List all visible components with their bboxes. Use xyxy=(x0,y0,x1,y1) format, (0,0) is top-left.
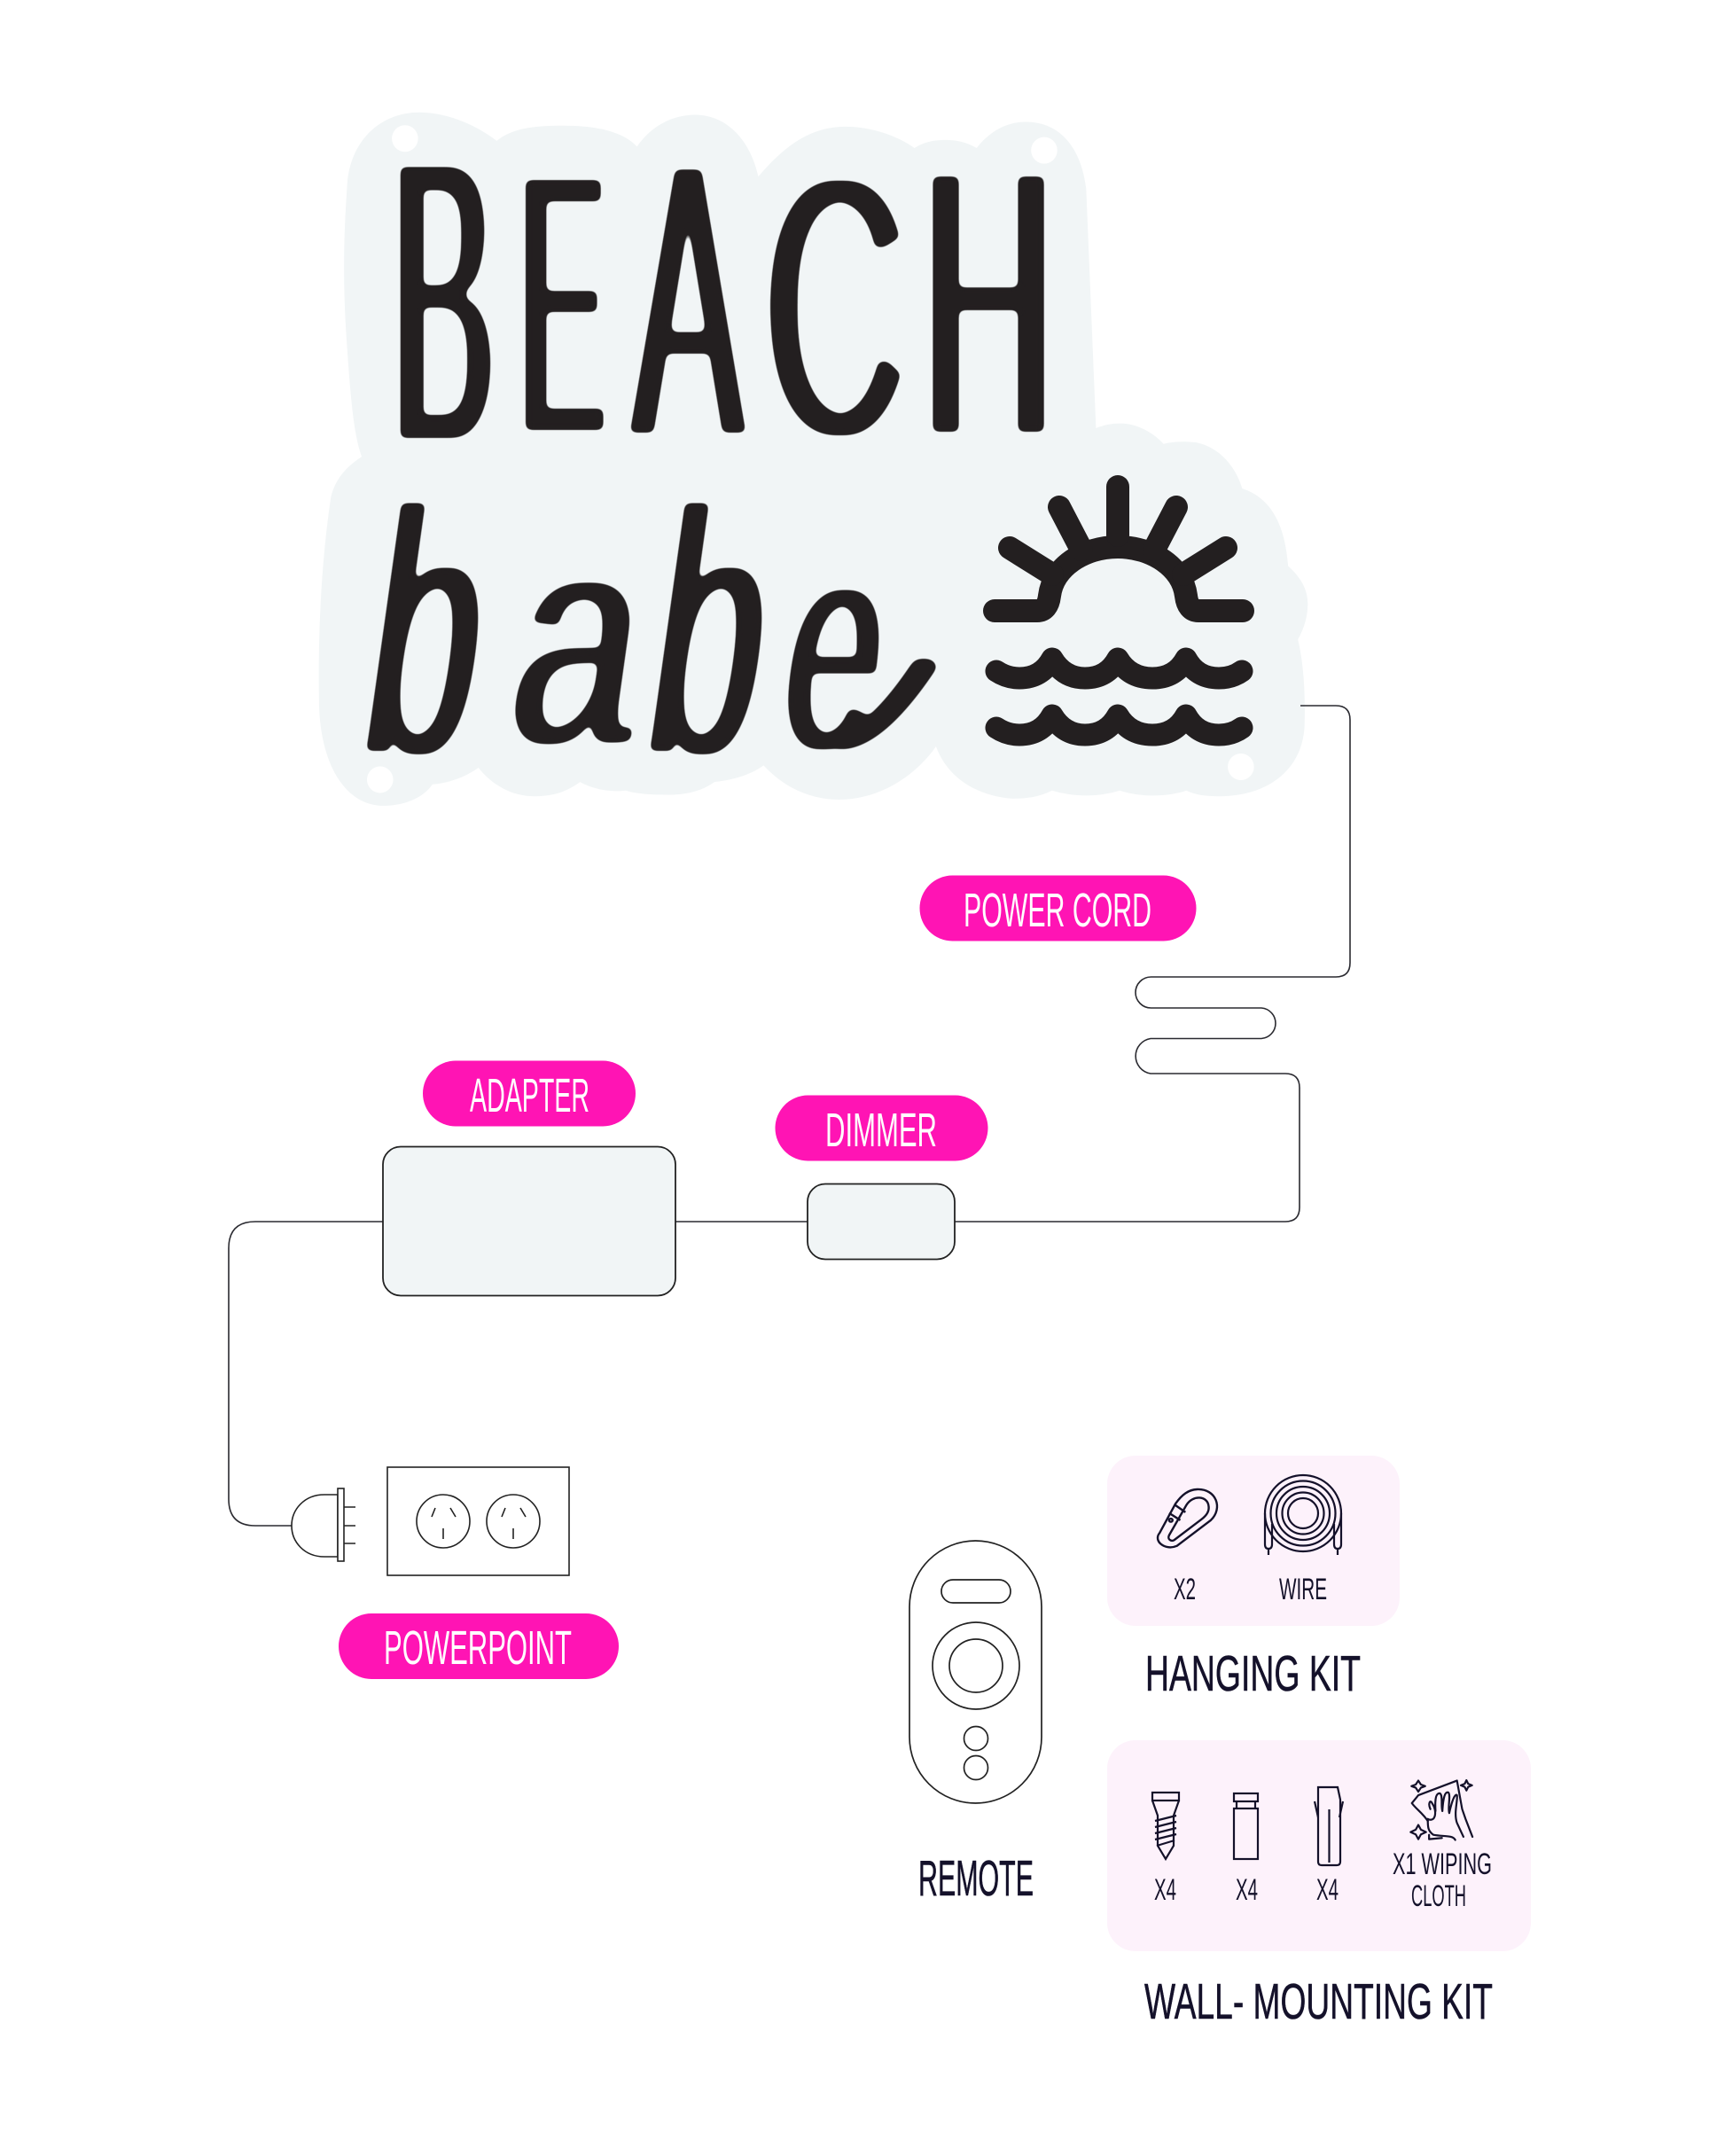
title word: BEACH: C xyxy=(765,100,905,514)
icon: sun over waves xyxy=(995,487,1243,735)
title word: BEACH xyxy=(393,77,1055,528)
label: power cord: POWER CORD xyxy=(964,884,1151,937)
caption: x1 wiping cloth: X1 WIPING xyxy=(1393,1847,1492,1881)
heading: wall-mounting kit: WALL- MOUNTING KIT xyxy=(1144,1973,1493,2030)
label: power cord xyxy=(920,876,1197,941)
title word: BEACH: B xyxy=(393,77,494,528)
caption: x4 wall plugs: X4 xyxy=(1316,1873,1339,1907)
label: powerpoint: POWERPOINT xyxy=(384,1621,572,1675)
label: adapter xyxy=(423,1060,636,1126)
sign: Beach babe xyxy=(319,77,1307,827)
power cord line xyxy=(955,706,1350,1222)
label: dimmer xyxy=(775,1096,987,1161)
sign acrylic backing xyxy=(319,113,1307,806)
caption: x2: X2 xyxy=(1174,1573,1196,1606)
title word: babe: b xyxy=(346,440,511,827)
title word: babe xyxy=(346,440,924,827)
title word: babe: e xyxy=(767,480,907,812)
label: dimmer: DIMMER xyxy=(825,1104,937,1157)
caption: x4 screws: X4 xyxy=(1154,1873,1176,1907)
remote control xyxy=(909,1541,1042,1803)
caption: wire: WIRE xyxy=(1279,1573,1327,1606)
title word: babe: a xyxy=(495,471,667,807)
adapter box xyxy=(383,1147,675,1296)
icon: plug xyxy=(292,1488,355,1561)
caption: x1 wiping cloth xyxy=(1393,1847,1492,1913)
icon: wall powerpoint xyxy=(387,1467,569,1575)
heading: remote: REMOTE xyxy=(918,1850,1034,1907)
title word: BEACH: A xyxy=(633,80,744,519)
title word: BEACH: E xyxy=(519,95,605,513)
panel: wall-mounting kit xyxy=(1107,1740,1531,1951)
icon: coiled wire xyxy=(1265,1475,1341,1555)
label: powerpoint xyxy=(339,1613,619,1679)
icon: screw xyxy=(1152,1793,1179,1859)
cable: adapter to plug xyxy=(229,1222,383,1526)
label: adapter: ADAPTER xyxy=(470,1069,589,1122)
cable: dimmer to adapter xyxy=(675,1221,808,1223)
icon: carabiner xyxy=(1158,1489,1217,1547)
heading: hanging kit: HANGING KIT xyxy=(1145,1645,1361,1702)
icon: spacer xyxy=(1234,1793,1258,1859)
icon: wall plug xyxy=(1315,1787,1343,1865)
dimmer box xyxy=(808,1184,955,1259)
title word: babe: b xyxy=(629,440,794,827)
caption: x1 wiping cloth: CLOTH xyxy=(1411,1879,1466,1913)
panel: hanging kit xyxy=(1107,1456,1400,1626)
caption: x4 spacers: X4 xyxy=(1236,1873,1258,1907)
title word: BEACH: H xyxy=(922,91,1055,517)
icon: hand wiping with cloth xyxy=(1410,1780,1472,1840)
flourish: tail of the final letter xyxy=(842,667,924,741)
